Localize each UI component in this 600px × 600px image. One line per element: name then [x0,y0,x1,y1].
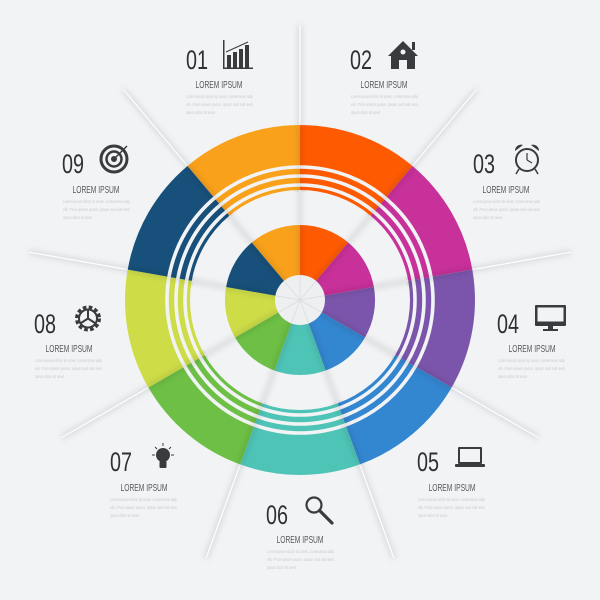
fold shading lines over chart [128,125,472,464]
item 03: ipsum dolor sit amet. [473,215,503,220]
item 06: LOREM IPSUM [276,534,324,546]
item 05: elit. Proin ipsum purus, ipsum sed nisl sem [418,505,485,510]
ring segments [125,125,475,475]
item 07: Lorem ipsum dolor sit amet, consectetur adip [110,497,177,502]
item 01: 01 [186,45,208,75]
item 02: 02 [350,45,372,75]
item 06: elit. Proin ipsum purus, ipsum sed nisl sem [267,557,334,562]
item 07: LOREM IPSUM [120,482,168,494]
item 07: ipsum dolor sit amet. [110,513,140,518]
item 02: Lorem ipsum dolor sit amet, consectetur adip [351,94,418,99]
item 09: Lorem ipsum dolor sit amet, consectetur adip [63,199,130,204]
item 01 [186,40,253,115]
item 04: Lorem ipsum dolor sit amet, consectetur adip [498,358,565,363]
item 05: 05 [417,447,439,477]
item 03: elit. Proin ipsum purus, ipsum sed nisl sem [473,207,540,212]
item 02 [350,41,418,115]
item 06: ipsum dolor sit amet. [267,565,297,570]
item 03: Lorem ipsum dolor sit amet, consectetur adip [473,199,540,204]
item 09: LOREM IPSUM [72,184,120,196]
item 06: Lorem ipsum dolor sit amet, consectetur adip [267,549,334,554]
item 02: LOREM IPSUM [360,79,408,91]
icon: magnifier [306,498,332,523]
icon: alarm clock [515,145,539,174]
item 06: 06 [266,500,288,530]
item 07 [110,443,177,518]
item 08: LOREM IPSUM [46,343,92,355]
item 06 [266,498,334,570]
icon: bar chart [223,40,253,69]
item 07: 07 [110,447,132,477]
item 03: 03 [473,149,495,179]
item 01: Lorem ipsum dolor sit amet, consectetur adip [186,94,253,99]
icon: monitor [535,305,566,331]
item 08: Lorem ipsum dolor sit amet, consectetur adip [35,358,102,363]
item 09: ipsum dolor sit amet. [63,215,93,220]
item 02: ipsum dolor sit amet. [351,110,381,115]
item 04 [497,305,566,379]
item 03: LOREM IPSUM [482,184,530,196]
item 05: ipsum dolor sit amet. [418,513,448,518]
item 08 [34,308,102,379]
inner pie [225,225,375,375]
item 01: elit. Proin ipsum purus, ipsum sed nisl sem [186,102,253,107]
icon: laptop [455,447,485,467]
icon: target [101,146,127,172]
item 08: 08 [34,309,56,339]
item 03 [473,145,540,220]
item 08: ipsum dolor sit amet. [35,374,65,379]
item 01: LOREM IPSUM [196,79,242,91]
item 08: elit. Proin ipsum purus, ipsum sed nisl sem [35,366,102,371]
ring white stripes [167,167,433,433]
item 09 [62,146,130,220]
item 01: ipsum dolor sit amet. [186,110,216,115]
icon: light bulb [152,443,174,468]
item 09: elit. Proin ipsum purus, ipsum sed nisl sem [63,207,130,212]
item 04: ipsum dolor sit amet. [498,374,528,379]
item 09: 09 [62,149,84,179]
icon: gear [77,308,99,330]
item 04: 04 [497,309,519,339]
icon: house [388,41,418,69]
item 05: Lorem ipsum dolor sit amet, consectetur adip [418,497,485,502]
chart: ring and pie [125,125,475,475]
item 04: LOREM IPSUM [508,343,556,355]
item 04: elit. Proin ipsum purus, ipsum sed nisl sem [498,366,565,371]
center circle [275,275,325,325]
item 05: LOREM IPSUM [428,482,476,494]
item 05 [417,447,485,518]
item 02: elit. Proin ipsum purus, ipsum sed nisl sem [351,102,418,107]
item 07: elit. Proin ipsum purus, ipsum sed nisl sem [110,505,177,510]
